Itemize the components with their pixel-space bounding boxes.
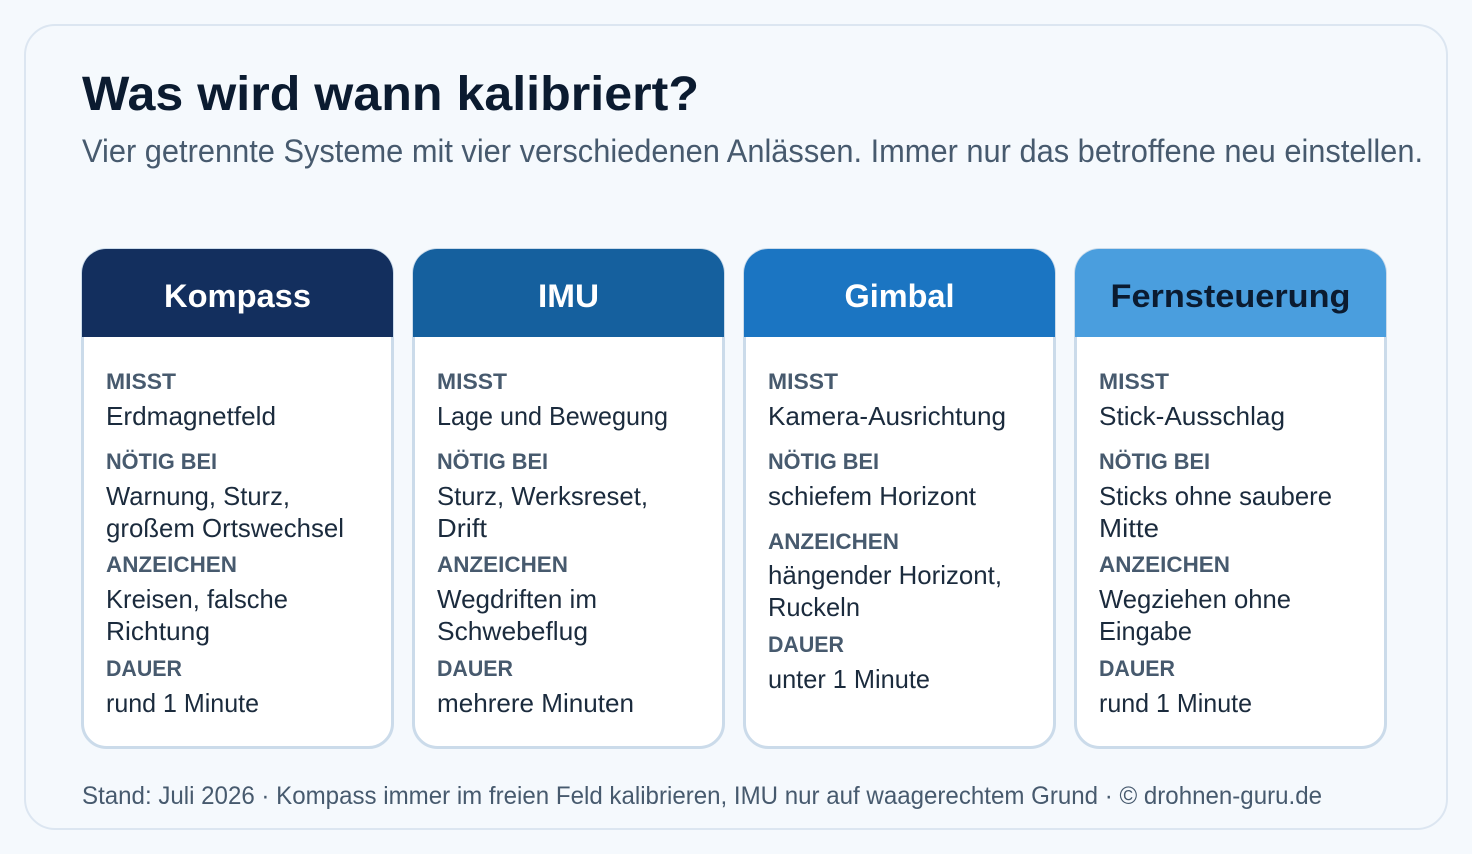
header: Gimbal [744, 249, 1055, 337]
content: Fernsteuerung: DAUER [1099, 656, 1175, 681]
content: IMU: DAUER [437, 656, 513, 681]
header: IMU: IMU [538, 278, 599, 314]
content: Fernsteuerung: Wegziehen ohne [1099, 584, 1291, 614]
content: Fernsteuerung: ANZEICHEN [1099, 552, 1230, 577]
content: Fernsteuerung: Stick-Ausschlag [1099, 401, 1285, 431]
panel: Gimbal [744, 249, 1055, 748]
content: Kompass: Erdmagnetfeld [106, 401, 276, 431]
content: Kompass: ANZEICHEN [106, 552, 237, 577]
content: Fernsteuerung: Sticks ohne saubere [1099, 481, 1332, 511]
content: Fernsteuerung: rund 1 Minute [1099, 688, 1252, 718]
content: Kompass: Warnung, Sturz, [106, 481, 290, 511]
footer note: Stand: Juli 2026 · Kompass immer im freien Feld kalibrieren, IMU nur auf waagerechtem Grund · © drohnen-guru.de [82, 782, 1322, 810]
header: Fernsteuerung: Fernsteuerung [1110, 278, 1350, 314]
content: Kompass: rund 1 Minute [106, 688, 259, 718]
content: IMU: Schwebeflug [437, 616, 588, 646]
content: Gimbal: NÖTIG BEI [768, 449, 879, 474]
content: IMU [437, 369, 668, 718]
content: Gimbal: ANZEICHEN [768, 529, 899, 554]
header: IMU [413, 249, 724, 337]
content: Gimbal: Kamera-Ausrichtung [768, 401, 1006, 431]
content: Kompass: Kreisen, falsche [106, 584, 288, 614]
content: Kompass: MISST [106, 369, 177, 394]
content: Fernsteuerung: MISST [1099, 369, 1170, 394]
content: Gimbal: unter 1 Minute [768, 664, 930, 694]
header: Kompass [82, 249, 393, 337]
content: IMU: ANZEICHEN [437, 552, 568, 577]
content: IMU: Wegdriften im [437, 584, 597, 614]
content: Fernsteuerung: Mitte [1099, 513, 1159, 543]
panel: IMU [413, 249, 724, 748]
content: Kompass [106, 369, 344, 718]
content: Gimbal: hängender Horizont, [768, 560, 1002, 590]
content: IMU: mehrere Minuten [437, 688, 634, 718]
content: Kompass: Richtung [106, 616, 210, 646]
content: IMU: Sturz, Werksreset, [437, 481, 648, 511]
subtitle: Vier getrennte Systeme mit vier verschiedenen Anlässen. Immer nur das betroffene neu einstellen. [82, 133, 1423, 169]
panel: Fernsteuerung [1075, 249, 1386, 748]
content: Fernsteuerung: NÖTIG BEI [1099, 449, 1210, 474]
content: Fernsteuerung: Eingabe [1099, 616, 1192, 646]
content: Kompass: DAUER [106, 656, 182, 681]
panel: Kompass [82, 249, 393, 748]
content: IMU: MISST [437, 369, 508, 394]
content: Kompass: großem Ortswechsel [106, 513, 344, 543]
header: Gimbal: Gimbal [844, 278, 954, 314]
content: Kompass: NÖTIG BEI [106, 449, 217, 474]
content: Gimbal [768, 369, 1006, 694]
content: IMU: NÖTIG BEI [437, 449, 548, 474]
content: Fernsteuerung [1099, 369, 1332, 718]
content: IMU: Lage und Bewegung [437, 401, 668, 431]
content: Gimbal: schiefem Horizont [768, 481, 977, 511]
content: Gimbal: Ruckeln [768, 592, 860, 622]
content: IMU: Drift [437, 513, 488, 543]
content: Gimbal: DAUER [768, 632, 844, 657]
header: Kompass: Kompass [164, 278, 311, 314]
header: Fernsteuerung [1075, 249, 1386, 337]
content: Gimbal: MISST [768, 369, 839, 394]
title: Was wird wann kalibriert? [82, 68, 699, 121]
